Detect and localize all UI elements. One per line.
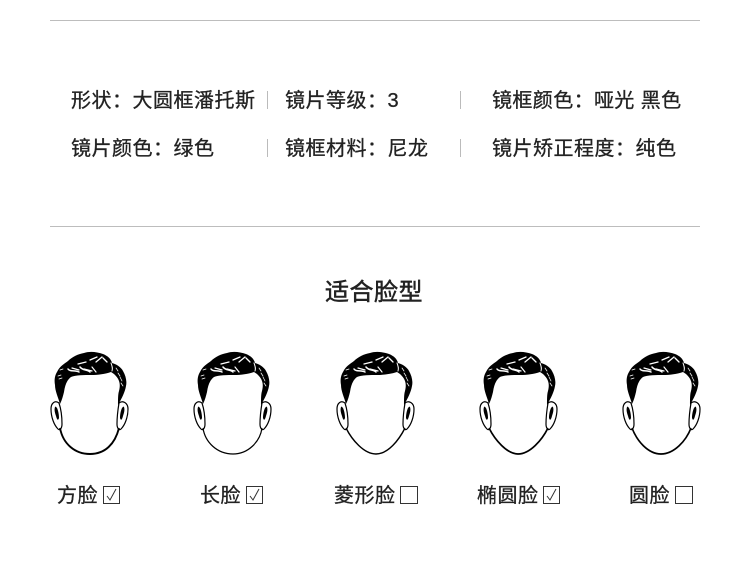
spec: lens correction: 镜片矫正程度：纯色 <box>492 138 676 160</box>
checkbox: oval face checked <box>544 486 560 504</box>
checkbox: round face unchecked <box>676 486 692 504</box>
face: oval <box>480 352 557 454</box>
spec: lens grade: 镜片等级：3 <box>285 90 399 112</box>
spec: lens colour: 镜片颜色：绿色 <box>71 138 214 160</box>
face: long <box>194 352 271 454</box>
spec: frame material: 镜框材料：尼龙 <box>285 138 428 160</box>
label: round face: 圆脸 <box>629 485 670 507</box>
spec: frame colour: 镜框颜色：哑光 黑色 <box>492 90 682 112</box>
label: square face: 方脸 <box>57 485 98 507</box>
label: diamond face: 菱形脸 <box>334 485 396 507</box>
label: oval face: 椭圆脸 <box>477 485 538 507</box>
face: diamond <box>337 352 414 454</box>
checkbox: square face checked <box>104 486 120 504</box>
face: round <box>623 352 700 454</box>
label: long face: 长脸 <box>200 485 241 507</box>
spec: shape: 形状：大圆框潘托斯 <box>71 90 256 112</box>
heading: suitable face shapes: 适合脸型 <box>325 279 423 306</box>
checkbox: long face checked <box>246 486 262 504</box>
checkbox: diamond face unchecked <box>400 486 418 504</box>
face: square <box>51 352 128 454</box>
